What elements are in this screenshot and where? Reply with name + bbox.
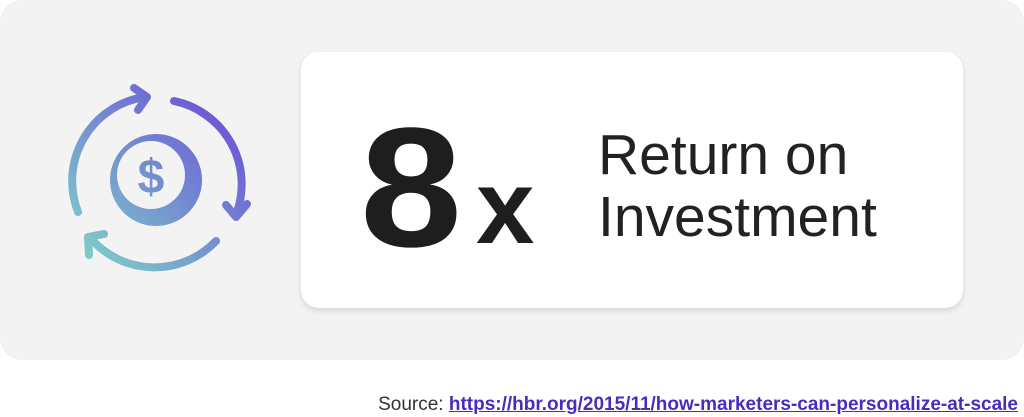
source: Source: https://hbr.org/2015/11/how-marketers-can-personalize-at-scale bbox=[378, 394, 1018, 415]
label text: Return on bbox=[598, 123, 848, 187]
card bbox=[301, 52, 963, 308]
label text bbox=[598, 123, 877, 249]
icon: money cycle: $ bbox=[138, 151, 165, 204]
label text: Investment bbox=[598, 185, 877, 249]
icon: money cycle bbox=[68, 84, 251, 272]
big number: 8 bbox=[360, 93, 462, 283]
multiplier x: x bbox=[476, 149, 534, 266]
